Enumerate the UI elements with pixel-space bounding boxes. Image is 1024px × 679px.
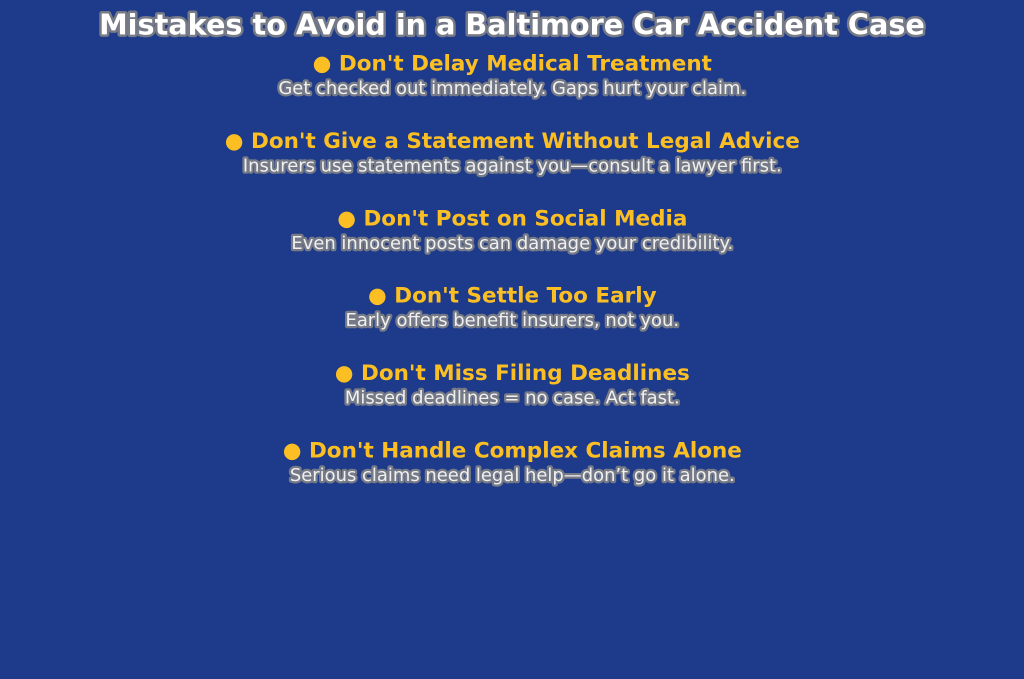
description 1: Get checked out immediately. Gaps hurt your claim. (278, 78, 746, 99)
mistake 3: social media (291, 206, 733, 254)
mistake 4: settling early (345, 284, 679, 331)
heading 4: ● Don't Settle Too Early (368, 284, 657, 309)
description 2: Insurers use statements against you—consult a lawyer first. (243, 155, 782, 176)
description 5: Missed deadlines = no case. Act fast. (345, 388, 680, 409)
mistake 6: complex claims (283, 438, 742, 486)
mistake 1: medical treatment (278, 52, 746, 99)
description 6: Serious claims need legal help—don’t go it alone. (290, 465, 735, 486)
mistake 2: statement (225, 129, 800, 176)
heading 3: ● Don't Post on Social Media (337, 206, 687, 231)
mistake 5: deadlines (335, 361, 690, 409)
heading 5: ● Don't Miss Filing Deadlines (335, 361, 690, 386)
heading 2: ● Don't Give a Statement Without Legal Advice (225, 129, 800, 154)
title: Mistakes to Avoid in a Baltimore Car Accident Case (99, 8, 925, 42)
description 4: Early offers benefit insurers, not you. (345, 310, 679, 331)
heading 1: ● Don't Delay Medical Treatment (313, 52, 712, 76)
description 3: Even innocent posts can damage your credibility. (291, 233, 733, 254)
heading 6: ● Don't Handle Complex Claims Alone (283, 438, 742, 464)
